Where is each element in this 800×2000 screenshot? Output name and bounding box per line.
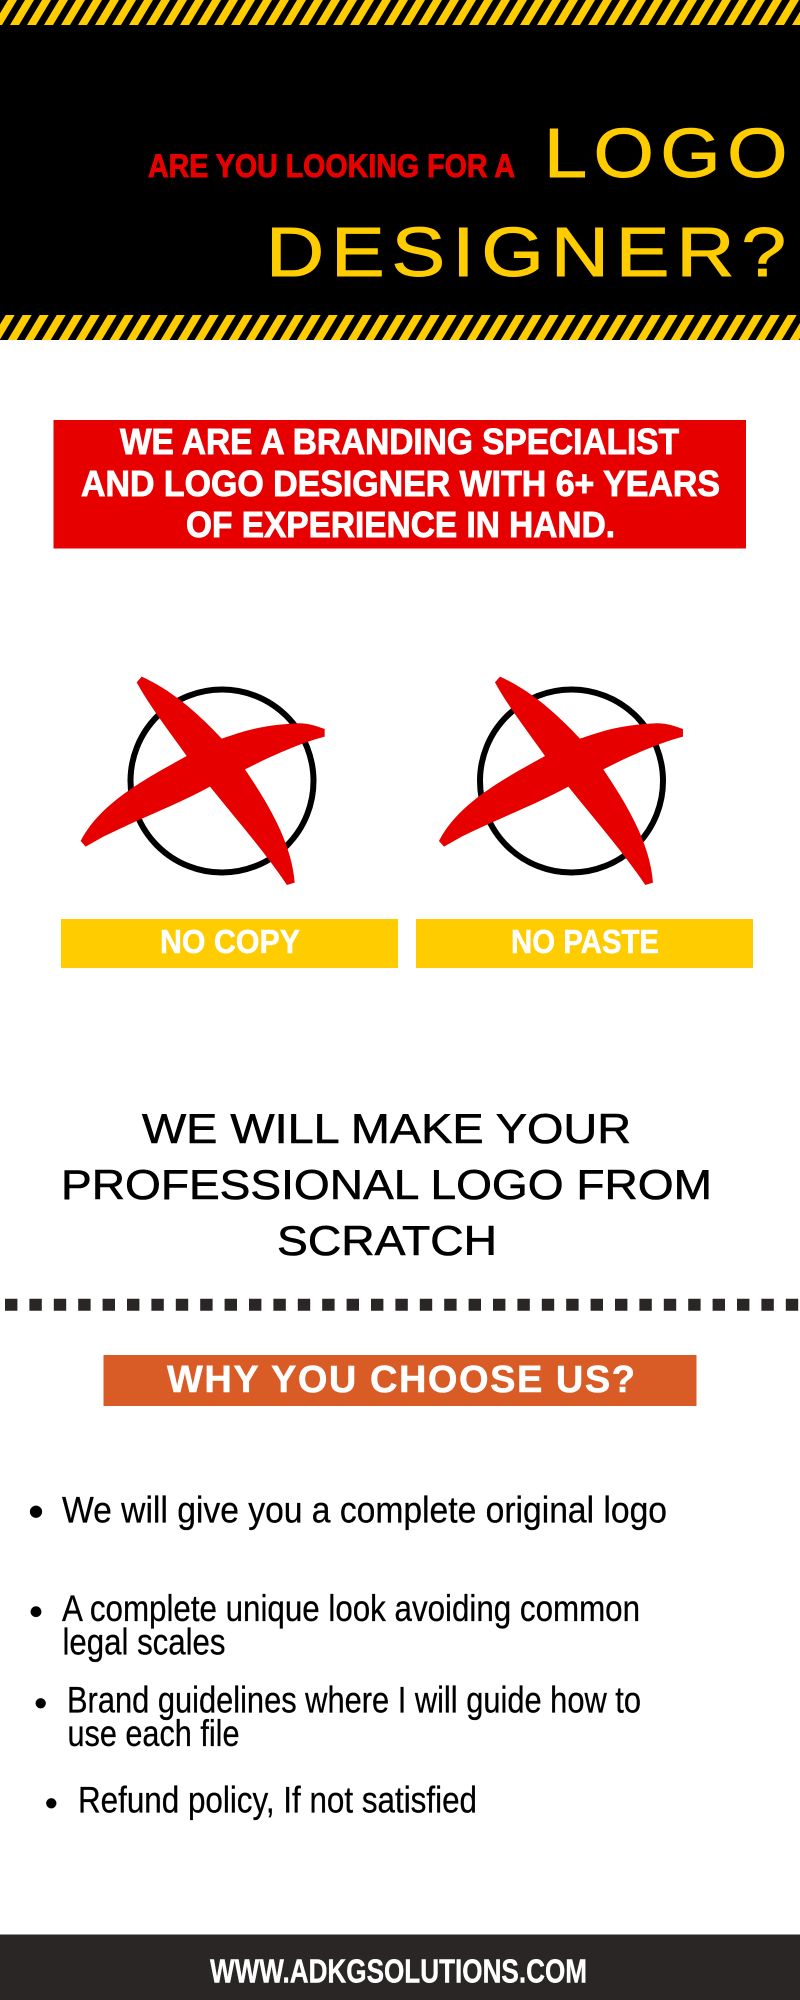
bullet 3 xyxy=(36,1680,641,1754)
bullet 3: use each file xyxy=(68,1713,240,1754)
panel: no paste xyxy=(416,677,753,968)
heading: why you choose us xyxy=(104,1355,696,1406)
title: logo: LOGO xyxy=(544,114,794,192)
label: no paste xyxy=(416,919,753,968)
bottom hazard stripe xyxy=(0,315,800,340)
heading: why you choose us: WHY YOU CHOOSE US? xyxy=(167,1359,635,1401)
panel: header band xyxy=(0,0,800,340)
heading: professional logo from scratch: WE WILL MAKE YOUR xyxy=(142,1105,631,1152)
callout: branding specialist banner: OF EXPERIENCE IN HAND. xyxy=(186,504,615,545)
title: are you looking for a: ARE YOU LOOKING FOR A xyxy=(148,148,515,184)
top hazard stripe xyxy=(0,0,800,25)
bullet 2 xyxy=(31,1588,640,1662)
bullet 1: We will give you a complete original logo xyxy=(62,1489,667,1530)
label: no copy xyxy=(61,919,398,968)
bullet 4: Refund policy, If not satisfied xyxy=(78,1780,477,1821)
label: no paste: NO PASTE xyxy=(511,923,659,960)
heading: professional logo from scratch: PROFESSIONAL LOGO FROM xyxy=(61,1161,712,1208)
title: designer: DESIGNER? xyxy=(266,213,793,291)
callout: branding specialist banner: AND LOGO DESIGNER WITH 6+ YEARS xyxy=(81,463,720,504)
callout: branding specialist banner: WE ARE A BRANDING SPECIALIST xyxy=(120,421,679,462)
footer: website: WWW.ADKGSOLUTIONS.COM xyxy=(210,1953,587,1990)
icon: crossed circle right xyxy=(439,677,683,885)
bullet 3: Brand guidelines where I will guide how to xyxy=(67,1680,641,1721)
footer: website xyxy=(0,1934,800,2000)
callout: branding specialist banner xyxy=(54,420,746,548)
panel: no copy xyxy=(61,677,398,968)
icon: crossed circle left xyxy=(81,677,325,885)
bullet list: reasons xyxy=(30,1489,667,1821)
label: no copy: NO COPY xyxy=(160,923,300,960)
bullet 2: A complete unique look avoiding common xyxy=(62,1588,640,1629)
heading: professional logo from scratch: SCRATCH xyxy=(277,1217,497,1264)
heading: professional logo from scratch xyxy=(61,1105,712,1264)
bullet 2: legal scales xyxy=(62,1621,226,1662)
